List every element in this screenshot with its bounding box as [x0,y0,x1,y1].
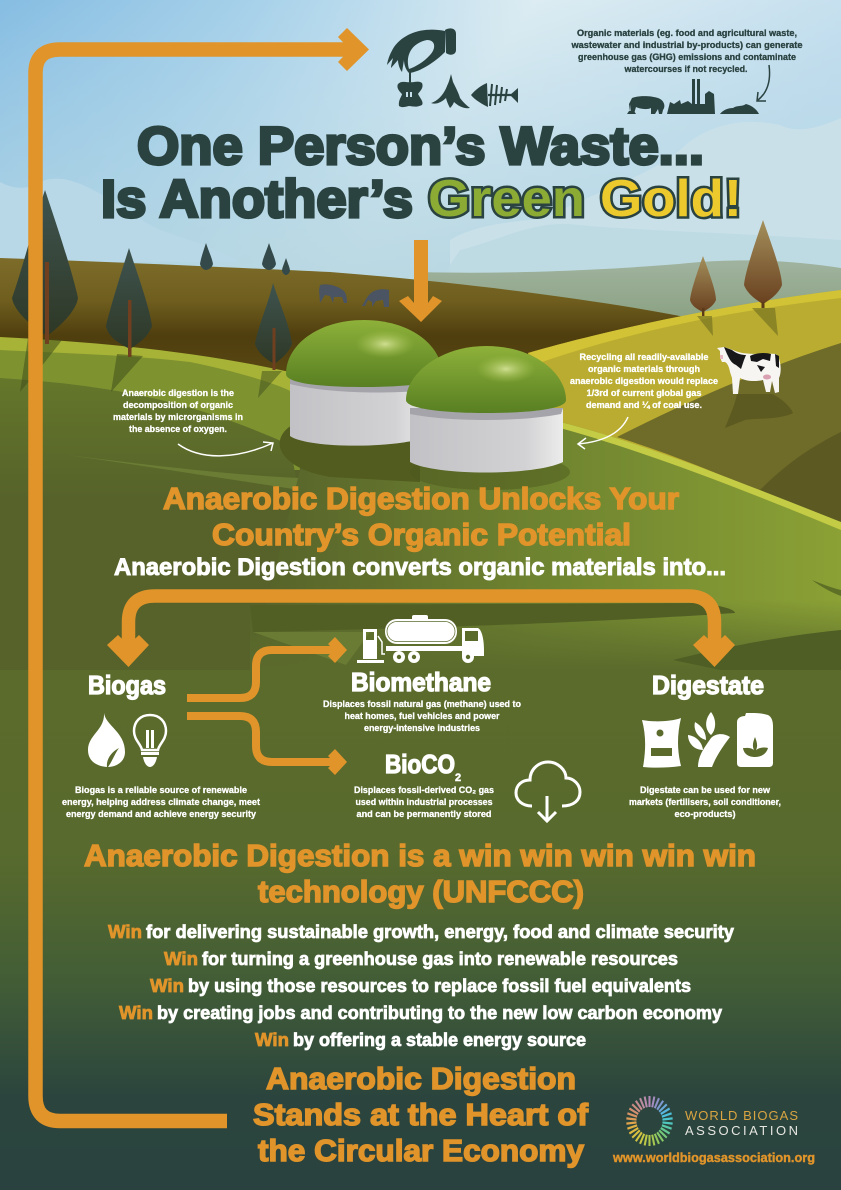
title: One Person’s Waste... [137,117,704,176]
text: bioco2 description: used within industrial processes [356,797,493,807]
text: organic materials note: Organic materials (eg. food and agricultural waste, [577,28,797,38]
arrow: title down to digesters [399,240,442,322]
heading: biomethane: Biomethane [351,667,491,697]
digester: left tank [286,320,442,446]
text: bioco2 description: and can be permanently stored [356,809,492,819]
heading: heart of the circular economy: Anaerobic Digestion [266,1061,576,1096]
arrow: statistic to tank [578,417,628,449]
icon: cloud with down arrow [516,762,580,821]
title: Is Another’s [101,170,413,229]
list: win reasons: for delivering sustainable growth, energy, food and climate security [146,921,735,942]
arrow: biogas to biomethane [187,637,347,698]
text: bioco2 description: Displaces fossil-derived CO₂ gas [354,785,494,795]
text: biogas description: energy demand and achieve energy security [66,809,256,819]
arrow: split to biogas and digestate [107,596,735,667]
list: win reasons: Win [164,948,198,969]
icon: cow, factory and heap silhouettes [627,79,759,114]
logo: association name: ASSOCIATION [685,1123,798,1138]
text: organic materials note [570,28,803,74]
digester: right tank [406,346,570,490]
heading: heart of the circular economy: Stands at the Heart of [253,1097,589,1132]
heading: heart of the circular economy [253,1061,589,1168]
background: hills and ground [0,258,841,1190]
arrow: biogas to bioco2 [187,716,347,775]
icon: fuel pump [357,629,385,663]
subheading: converts organic materials: Anaerobic Digestion converts organic materials into... [114,554,726,581]
text: anaerobic digestion definition: materials by microrganisms in [113,412,243,422]
title: Gold! [600,170,742,228]
text: digestate description [629,785,781,819]
background: sky [0,0,841,300]
text: bioco2 description [354,785,494,819]
icon: tanker truck [385,615,484,663]
text: organic materials note: wastewater and industrial by-products) can generate [570,40,803,50]
logo: association name: WORLD BIOGAS [685,1108,798,1123]
list: win reasons: by using those resources to replace fossil fuel equivalents [188,975,691,996]
trees: dark left group [12,190,292,398]
text: recycling statistic: demand and ¼ of coal use. [586,400,702,410]
text: organic materials note: greenhouse gas (GHG) emissions and contaminate [578,52,796,62]
text: biogas description: energy, helping address climate change, meet [62,797,260,807]
icon: hand holding apple core [387,28,456,107]
heading: biogas: Biogas [88,670,166,700]
text: biomethane description [323,699,522,733]
heading: bioco2: 2 [455,772,461,784]
title [101,117,742,229]
text: digestate description: Digestate can be used for new [640,785,770,795]
list: win reasons: for turning a greenhouse gas into renewable resources [202,948,678,969]
heading: win win technology: Anaerobic Digestion is a win win win win win [84,838,756,873]
icon: distant grazing cows [319,284,389,307]
orange loop arrow around the page [36,28,369,1121]
heading: win win technology: technology (UNFCCC) [258,874,584,909]
text: website url: www.worldbiogasassociation.org [612,1151,815,1165]
text: digestate description: eco-products) [674,809,736,819]
icon: holstein cow [717,347,793,428]
heading: unlocks organic potential [163,481,679,552]
text: recycling statistic: Recycling all readily-available [580,352,709,362]
text: recycling statistic: anaerobic digestion would replace [570,376,718,386]
text: anaerobic digestion definition: Anaerobic digestion is the [122,388,234,398]
arrow: note to heap [757,65,770,101]
trees: brown right group [690,220,782,336]
list: win reasons: Win [255,1029,289,1050]
text: recycling statistic: 1/3rd of current global gas [586,388,702,398]
list: win reasons: Win [119,1002,153,1023]
text: biomethane description: Displaces fossil natural gas (methane) used to [323,699,522,709]
icon: liquid jug [737,713,773,767]
text: biogas description [62,785,260,819]
heading: unlocks organic potential: Anaerobic Digestion Unlocks Your [163,481,679,516]
text: anaerobic digestion definition: the absence of oxygen. [129,424,227,434]
text: recycling statistic [570,352,718,410]
icon: plant [688,712,730,767]
list: win reasons: by creating jobs and contributing to the new low carbon economy [157,1002,723,1023]
text: anaerobic digestion definition [113,388,243,434]
text: biomethane description: energy-intensive industries [364,723,480,733]
heading: bioco2: BioCO [385,749,455,779]
title: Green [428,170,585,228]
heading: digestate: Digestate [652,670,764,700]
list: win reasons: by offering a stable energy source [293,1029,586,1050]
icon: banana peel [431,74,470,108]
text: anaerobic digestion definition: decomposition of organic [123,400,233,410]
heading: heart of the circular economy: the Circular Economy [258,1133,585,1168]
text: organic materials note: watercourses if not recycled. [623,64,748,74]
text: biomethane description: heat homes, fuel vehicles and power [344,711,500,721]
arrow: definition to tank [178,442,273,456]
icon: fish skeleton [471,83,518,107]
heading: unlocks organic potential: Country’s Organic Potential [212,517,631,552]
icon: flame [88,713,125,767]
logo: association name [685,1108,798,1138]
list: win reasons: Win [150,975,184,996]
icon: fertiliser bag [642,718,681,768]
list: win reasons [108,921,735,1050]
list: win reasons: Win [108,921,142,942]
icon: light bulb [134,715,166,767]
logo: world biogas association ring [626,1096,673,1146]
heading: win win technology [84,838,756,909]
text: recycling statistic: organic materials through [588,364,700,374]
text: digestate description: markets (fertilisers, soil conditioner, [629,797,781,807]
text: biogas description: Biogas is a reliable source of renewable [75,785,247,795]
